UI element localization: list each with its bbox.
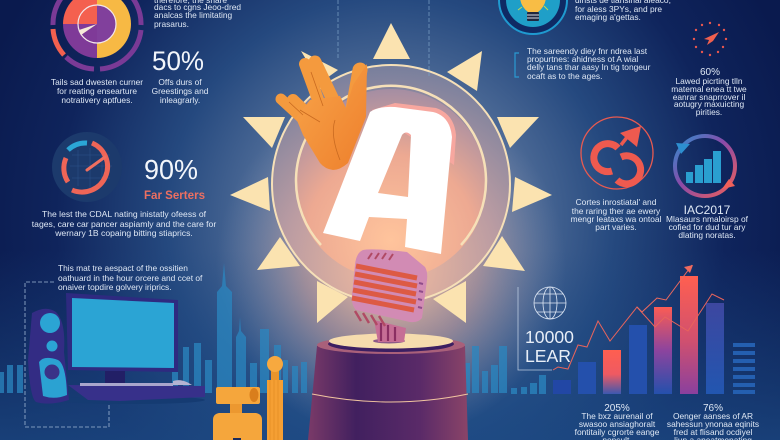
text: 76% block: 76% xyxy=(703,403,723,414)
text: cycle caption: mengr leataxs wa ontoal xyxy=(571,214,662,224)
text: donut caption: Tails sad dwesten curner xyxy=(51,77,143,87)
text: cycle caption: Cortes inrostiatal' and xyxy=(576,197,657,207)
text: 50% caption: Greestings and xyxy=(152,86,209,96)
text: 50% caption: inleagrarly. xyxy=(160,95,200,105)
text: cycle caption: part varies. xyxy=(595,222,637,232)
text: cycle caption: the raring ther ae ewery xyxy=(572,206,661,216)
text: donut caption: for reating ensearture xyxy=(57,86,137,96)
sun rays xyxy=(230,23,552,323)
text: 76% block: fred at flisand ocdiyel xyxy=(674,427,752,437)
text: 205% block: swasoo ansiaghoralt xyxy=(579,419,656,429)
text: IAC caption: dlating noratas. xyxy=(678,230,736,240)
stat: 90%: 90% xyxy=(144,154,198,185)
text: 205% block: fontitaily cgrorte eange xyxy=(575,427,660,437)
text: gauge caption: The lest the CDAL nating inistatly ofeess of xyxy=(42,209,207,219)
microphone xyxy=(352,249,427,344)
hand xyxy=(281,62,367,170)
dashed guide lines xyxy=(338,0,429,76)
podium xyxy=(308,334,468,440)
stat: 10000 LEAR: LEAR xyxy=(525,346,571,366)
label: Far Serters: Far Serters xyxy=(144,188,205,202)
icon: circular bar chart xyxy=(675,136,735,196)
text: right block: ocaft as to the ages. xyxy=(527,71,602,81)
bar chart xyxy=(553,265,755,394)
text: bottom left: This mat tre aespact of the ossitien xyxy=(58,263,188,273)
text: IAC caption xyxy=(666,214,749,240)
text: 50% caption xyxy=(152,77,209,105)
text: 60% caption: eanrar snaprrover il xyxy=(673,92,745,102)
text: 205% block: 205% xyxy=(604,403,630,414)
text: 60% caption: matemal enea tt twe xyxy=(671,84,747,94)
text: top left intro: analcas the limitating xyxy=(154,10,233,20)
icon: orange post xyxy=(267,356,283,440)
text: gauge caption: wernary 1B copaing bitting stiaprics. xyxy=(54,228,193,238)
text: bottom left xyxy=(58,263,203,292)
text: IAC caption: Mlasaurs nmaloirsp of xyxy=(666,214,749,224)
label: IAC2017: IAC2017 xyxy=(684,203,731,217)
bracket xyxy=(515,53,519,77)
text: 76% block xyxy=(667,403,759,440)
stat: 50%: 50% xyxy=(152,46,204,76)
text: IAC caption: cofied for dud tur ary xyxy=(669,222,746,232)
text: right block xyxy=(527,46,651,81)
text: 60% caption xyxy=(671,76,747,117)
text: 60% caption: pirities. xyxy=(696,107,722,117)
text: top left intro: dacs to cgns Jeoo-dred xyxy=(154,2,241,12)
text: donut caption xyxy=(51,77,143,105)
icon: globe xyxy=(534,287,566,319)
icon: orange machine xyxy=(213,387,262,440)
text: 76% block: Oenger aanses of AR xyxy=(673,411,753,421)
text: 60% caption: Lawed picrting tlln xyxy=(675,76,743,86)
stat: 60%: 60% xyxy=(700,67,720,78)
stat: 10000 LEAR: 10000 xyxy=(525,327,574,347)
icon: red cycle arrow xyxy=(581,117,653,189)
text: gauge caption: tages, care car pancer aspiamly and the care for xyxy=(32,219,216,229)
icon: computer xyxy=(55,293,205,404)
icon: speaker xyxy=(28,309,69,404)
text: 205% block xyxy=(575,403,660,440)
stat: 10000 LEAR xyxy=(525,327,574,366)
icon: light bulb xyxy=(499,0,567,34)
icon: gauge xyxy=(52,132,122,202)
text: right block: delly tans thar aasy In tig tongeur xyxy=(527,62,651,72)
text: 205% block: The bxz aurenail of xyxy=(581,411,653,421)
text: cycle caption xyxy=(571,197,662,232)
text: gauge caption xyxy=(32,209,216,238)
sun rings and disc xyxy=(272,65,510,303)
dashed frame xyxy=(25,282,109,427)
text: bulb caption: emaging a'gettas. xyxy=(575,12,641,22)
icon: donut chart xyxy=(53,0,141,69)
text: top left intro xyxy=(154,0,241,29)
frame: 10000 learn xyxy=(518,287,552,370)
letter A xyxy=(323,103,456,254)
text: right block: propurtnes: ahidness ot A wial xyxy=(527,54,638,64)
skyline xyxy=(0,263,546,394)
text: 50% caption: Offs durs of xyxy=(158,77,202,87)
text: top left intro: prasarus. xyxy=(154,19,189,29)
icon: compass xyxy=(693,22,727,56)
text: bulb caption xyxy=(575,0,671,22)
text: 60% caption: aotugry maxuicting xyxy=(674,99,744,109)
text: donut caption: notrativery aptfues. xyxy=(61,95,133,105)
text: bulb caption: for aless 3PYs, and pre xyxy=(575,4,662,14)
text: bottom left: oathuard in the hour orcere and ccet of xyxy=(58,273,203,283)
text: bottom left: onaiver topdire golvery iriprics. xyxy=(58,282,172,292)
text: right block: The sareendy diey fnr ndrea last xyxy=(527,46,648,56)
text: 76% block: sahessun ynonaa eqinits xyxy=(667,419,759,429)
